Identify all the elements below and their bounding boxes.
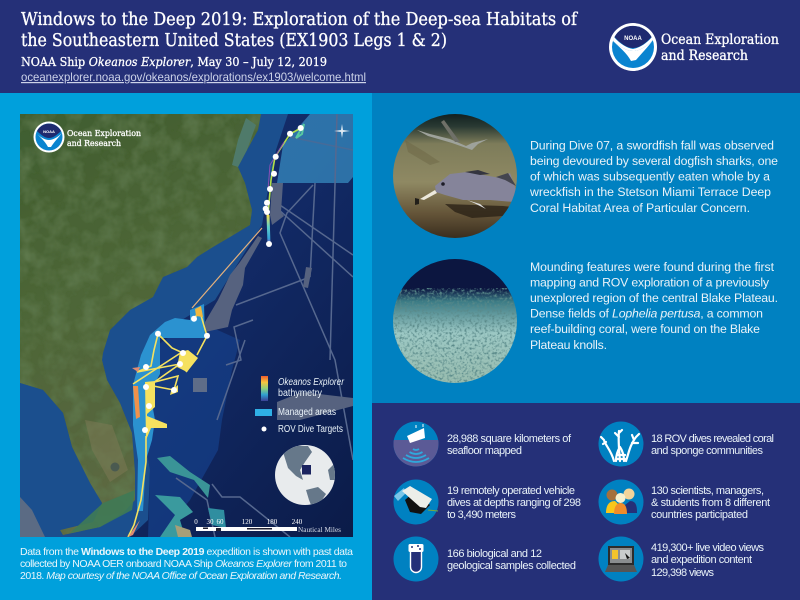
text: coral communities xyxy=(651,433,774,457)
map caption: collected by NOAA OER onboard NOAA Ship Okeanos Explorer from 2011 to xyxy=(20,558,347,570)
text: coral communities: and sponge communities xyxy=(651,445,764,457)
text: video views xyxy=(651,542,764,579)
title xyxy=(21,10,578,51)
map logo text: and Research xyxy=(67,139,121,149)
legend: bathymetry xyxy=(278,388,322,399)
lake okeechobee xyxy=(110,462,120,472)
text: mounding features: reef-building coral, were found on the Blake xyxy=(530,322,760,336)
text: swordfish fall: Coral Habitat Area of Particular Concern. xyxy=(530,201,750,215)
florida everglades xyxy=(70,490,135,533)
map caption: 2018. Map courtesy of the NOAA Office of Ocean Exploration and Research. xyxy=(20,570,342,582)
text: samples xyxy=(447,548,576,572)
icon: people xyxy=(598,480,644,524)
map logo: NOAA xyxy=(43,129,55,134)
icon: mapping ship and sonar xyxy=(393,422,439,468)
background panel: map column xyxy=(0,93,372,600)
text: video views: and expedition content xyxy=(651,554,752,566)
url: oceanexplorer.noaa.gov/okeanos/explorations/ex1903/welcome.html xyxy=(21,70,366,84)
icon: NOAA logo: NOAA xyxy=(624,36,642,42)
icon: coral xyxy=(598,422,644,466)
blake plateau xyxy=(148,324,240,537)
text: mounding features: Plateau knolls. xyxy=(530,338,607,352)
text: swordfish fall: During Dive 07, a swordfish fall was observed xyxy=(530,138,774,152)
managed areas south xyxy=(133,304,205,511)
title: Windows to the Deep 2019: Exploration of the Deep-sea Habitats of xyxy=(21,10,578,30)
icon: compass xyxy=(334,124,350,138)
logo text: and Research xyxy=(661,48,748,64)
legend xyxy=(255,376,345,435)
map logo text: Ocean Exploration xyxy=(67,129,141,139)
text: rov dives: 19 remotely operated vehicle xyxy=(447,485,575,497)
florida interior xyxy=(85,420,128,482)
map caption xyxy=(20,546,353,582)
photo: lophelia coral xyxy=(393,259,517,383)
text: mounding features: Mounding features were found during the first xyxy=(530,260,775,274)
title: the Southeastern United States (EX1903 Legs 1 & 2) xyxy=(21,31,447,51)
text: swordfish fall xyxy=(529,138,778,215)
background panel: highlights xyxy=(372,93,800,403)
icon: laptop xyxy=(598,536,644,582)
text: participants: & students from 8 different xyxy=(651,497,770,509)
yellow mapping blocks xyxy=(145,306,203,440)
logo text xyxy=(661,32,779,64)
text: participants xyxy=(651,485,770,521)
legend: Okeanos Explorer xyxy=(278,377,345,388)
subtitle: NOAA Ship Okeanos Explorer, May 30 – July 12, 2019 xyxy=(21,54,327,69)
text: swordfish fall: of which was subsequently eaten whole by a xyxy=(530,170,770,184)
photo: swordfish and wreckfish xyxy=(393,114,517,238)
scale bar: 240 xyxy=(292,518,303,526)
text: video views: 129,398 views xyxy=(651,567,714,579)
text: rov dives: to 3,490 meters xyxy=(447,509,516,521)
past survey blocks xyxy=(205,183,284,332)
scale bar: 120 xyxy=(242,518,253,526)
logo text: Ocean Exploration xyxy=(661,32,779,48)
map caption: Data from the Windows to the Deep 2019 expedition is shown with past data xyxy=(20,546,353,558)
text: participants: 130 scientists, managers, xyxy=(651,485,764,497)
header xyxy=(0,0,800,93)
icon: rov xyxy=(394,480,438,524)
scale bar: 0 xyxy=(194,518,198,526)
scale bar: 30 xyxy=(206,518,214,526)
scale bar: 180 xyxy=(267,518,278,526)
continental shelf xyxy=(20,114,288,537)
text: coral communities: 18 ROV dives revealed coral xyxy=(651,433,774,445)
legend: Managed areas xyxy=(278,407,336,418)
expedition route xyxy=(128,124,304,537)
text: mounding features: unexplored region of the central Blake Plateau. xyxy=(530,291,778,305)
text: rov dives xyxy=(447,485,581,521)
gulf of mexico xyxy=(20,383,102,537)
text: rov dives: dives at depths ranging of 298 xyxy=(447,497,581,509)
past tracks xyxy=(176,114,353,537)
text: swordfish fall: being devoured by several dogfish sharks, one xyxy=(530,154,778,168)
icon: test tube xyxy=(394,536,438,582)
land xyxy=(20,114,261,535)
text: seafloor mapped: seafloor mapped xyxy=(447,445,522,457)
text: video views: 419,300+ live video views xyxy=(651,542,764,554)
text: mounding features: Dense fields of Lophelia pertusa, a common xyxy=(530,306,763,320)
legend: ROV Dive Targets xyxy=(278,424,343,435)
bahamas xyxy=(157,456,210,498)
icon: NOAA logo xyxy=(609,23,657,71)
background panel: statistics xyxy=(372,403,800,600)
text: swordfish fall: wreckfish in the Stetson Miami Terrace Deep xyxy=(529,185,771,199)
cuba corner xyxy=(20,497,45,537)
map xyxy=(20,114,353,537)
text: samples: 166 biological and 12 xyxy=(447,548,542,560)
text: seafloor mapped xyxy=(447,433,572,457)
map logo text xyxy=(67,129,141,146)
text: participants: countries participated xyxy=(651,509,748,521)
text: samples: geological samples collected xyxy=(447,560,576,572)
chesapeake bay xyxy=(232,118,256,167)
scale bar: 60 xyxy=(216,518,224,526)
text: mounding features: mapping and ROV exploration of a previously xyxy=(530,276,770,290)
text: mounding features xyxy=(530,260,778,352)
managed area north xyxy=(277,114,353,183)
scale bar: Nautical Miles xyxy=(298,526,341,534)
map logo xyxy=(34,122,64,152)
orange strip xyxy=(133,386,140,419)
scale bar xyxy=(194,519,341,532)
locator globe xyxy=(275,445,336,510)
text: seafloor mapped: 28,988 square kilometers of xyxy=(447,433,572,445)
rov dive targets xyxy=(142,125,304,433)
